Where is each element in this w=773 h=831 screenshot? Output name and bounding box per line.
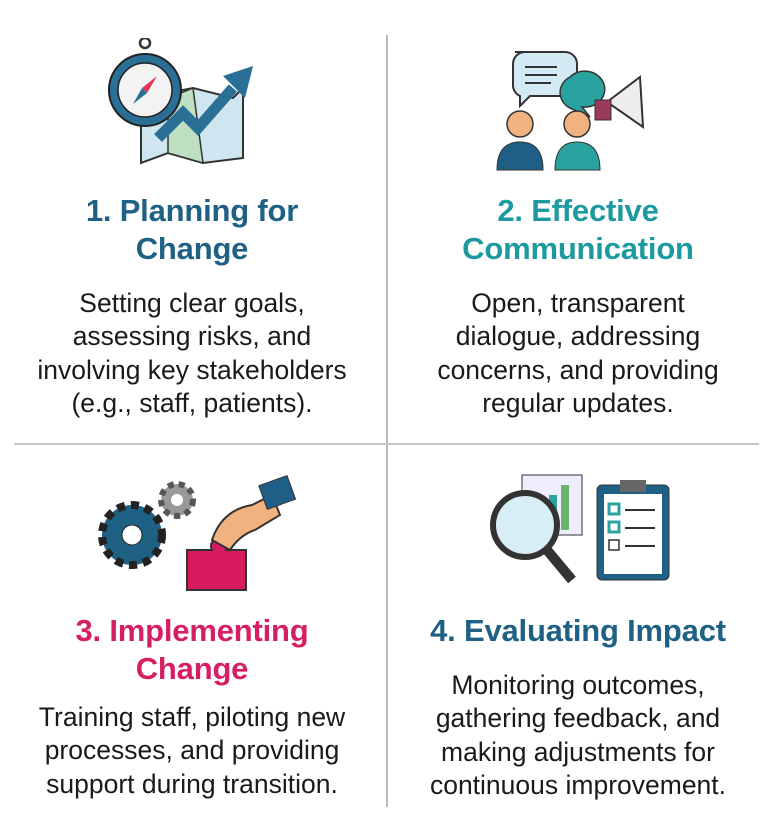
text: involving key stakeholders xyxy=(37,355,347,385)
text: support during transition. xyxy=(46,769,338,799)
title: Communication xyxy=(462,231,694,266)
text: gathering feedback, and xyxy=(436,703,720,733)
text: dialogue, addressing xyxy=(456,321,700,351)
text xyxy=(37,288,347,418)
title: 4. Evaluating Impact xyxy=(430,613,726,648)
panel: evaluating xyxy=(430,474,726,800)
title: Change xyxy=(136,231,248,266)
title: Change xyxy=(136,651,248,686)
text: processes, and providing xyxy=(45,735,339,765)
title: 3. Implementing xyxy=(76,613,308,648)
text: (e.g., staff, patients). xyxy=(71,388,313,418)
text: continuous improvement. xyxy=(430,770,726,800)
panel: planning xyxy=(37,38,347,418)
text xyxy=(437,288,719,418)
text: Open, transparent xyxy=(471,288,685,318)
icon: magnifier and clipboard xyxy=(490,474,670,584)
icon: gears and puzzle xyxy=(98,475,296,591)
title: 2. Effective xyxy=(497,193,659,228)
text: Training staff, piloting new xyxy=(39,702,345,732)
panel: communication xyxy=(437,51,719,418)
text: concerns, and providing xyxy=(437,355,719,385)
icon: people and megaphone xyxy=(496,51,644,170)
text: assessing risks, and xyxy=(73,321,311,351)
title: 1. Planning for xyxy=(86,193,298,228)
text: Monitoring outcomes, xyxy=(451,670,705,700)
title xyxy=(462,193,694,266)
text: making adjustments for xyxy=(441,737,715,767)
icon: compass and map xyxy=(108,38,253,164)
title xyxy=(86,193,298,266)
text: regular updates. xyxy=(482,388,674,418)
title xyxy=(76,613,308,686)
text xyxy=(430,670,726,800)
text: Setting clear goals, xyxy=(79,288,305,318)
text xyxy=(39,702,346,799)
panel: implementing xyxy=(39,475,346,799)
